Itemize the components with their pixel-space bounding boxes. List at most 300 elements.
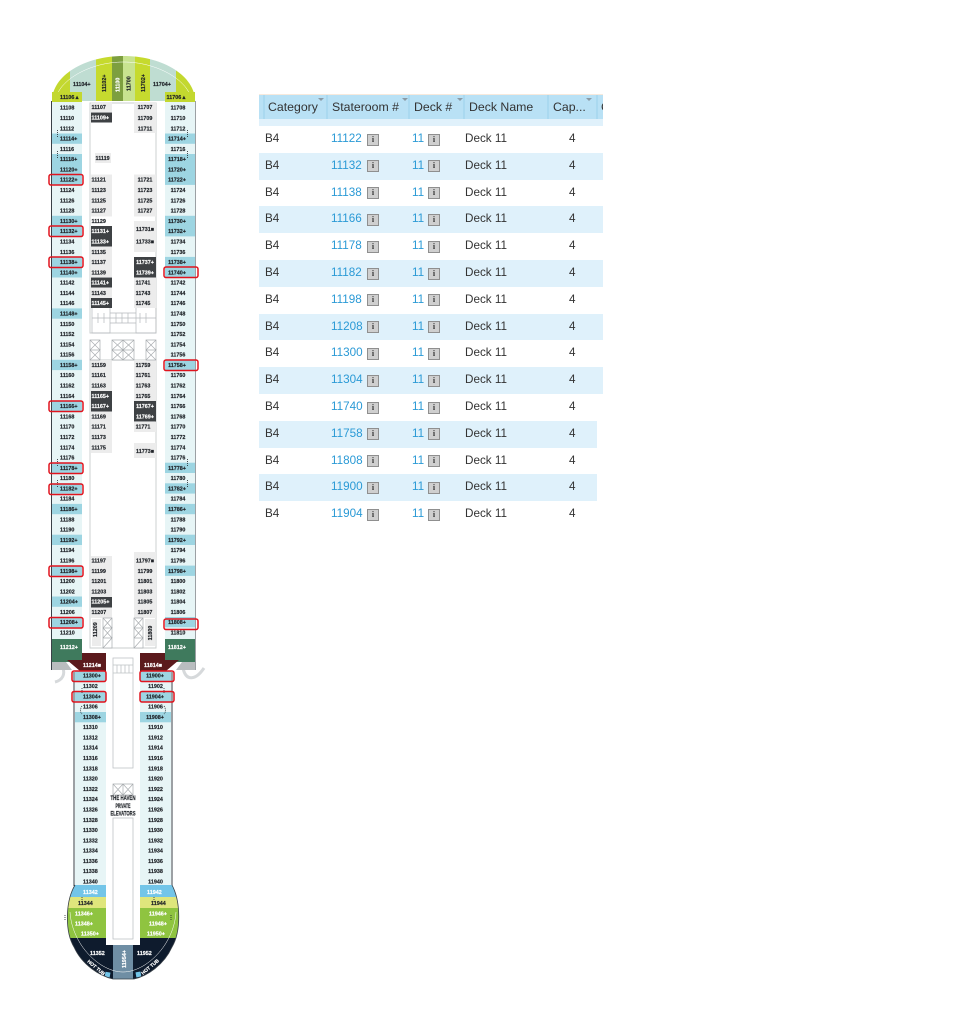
row 11740	[265, 400, 576, 414]
starboard cabin numbers: 11770	[171, 425, 185, 431]
aft starboard cabin numbers: 11928	[148, 818, 163, 824]
row 11300: i	[372, 349, 374, 358]
bow suite labels: 11102+	[102, 74, 108, 92]
central starboard inside cabin numbers: 11773■	[136, 449, 154, 455]
port cabin numbers: 11174	[60, 445, 74, 451]
row 11304: 4	[569, 373, 576, 386]
row 11182: 11182	[331, 266, 362, 279]
central starboard inside cabin numbers: 11733■	[136, 240, 154, 246]
row 11198: Deck 11	[465, 293, 507, 306]
aft starboard cabin numbers: 11914	[148, 746, 163, 752]
starboard cabin numbers: 11734	[171, 240, 185, 246]
row 11132: 11132	[331, 159, 362, 172]
stern cabin labels: 11954+	[122, 950, 128, 968]
row 11740: 11740	[331, 400, 363, 413]
central starboard inside cabin numbers: 11809	[148, 626, 154, 640]
port cabin numbers: 11198+	[60, 569, 78, 575]
aft starboard cabin numbers: 11936	[148, 859, 163, 865]
central port inside cabin numbers: 11161	[92, 373, 106, 379]
central starboard inside cabin numbers: 11799	[138, 569, 152, 575]
starboard cabin numbers: 11742	[171, 281, 185, 287]
port cabin numbers: 11128	[60, 209, 74, 215]
port cabin numbers: 11178+	[60, 466, 78, 472]
central port inside cabin numbers: 11199	[92, 569, 106, 575]
row 11178: 4	[569, 239, 576, 252]
row 11208: 11208	[331, 320, 363, 333]
central starboard inside cabin numbers: 11761	[136, 373, 150, 379]
row 11122: 11122	[331, 132, 362, 145]
starboard cabin numbers: 11708	[171, 106, 185, 112]
central starboard inside cabin numbers: 11771	[136, 425, 150, 431]
aft starboard cabin numbers: 11906	[148, 705, 163, 711]
aft port cabin numbers: 11312	[83, 735, 98, 741]
starboard cabin numbers: 11800	[171, 579, 185, 585]
starboard cabin numbers: 11740+	[168, 270, 186, 276]
aft port cabin numbers: 11310	[83, 725, 98, 731]
port cabin numbers: 11210	[60, 630, 75, 636]
central port inside cabin numbers: 11203	[92, 589, 106, 595]
row 11758	[259, 421, 597, 448]
row 11758: i	[433, 429, 435, 438]
row 11808: i	[433, 456, 435, 465]
row 11740: B4	[265, 400, 279, 413]
starboard cabin numbers	[168, 106, 186, 636]
green suites 11212 and 11812: 11812+	[168, 645, 186, 651]
port cabin numbers: 11190	[60, 528, 74, 534]
port cabin numbers: 11144	[60, 291, 74, 297]
starboard cabin numbers: 11774	[171, 445, 185, 451]
starboard cabin numbers: 11752	[171, 332, 185, 338]
row 11178: 11178	[331, 239, 362, 252]
aft port cabin numbers: 11324	[83, 797, 98, 803]
bow suite labels: 11704+	[153, 82, 171, 88]
row 11304: 11304	[331, 373, 363, 386]
table header: Deck Name	[469, 100, 533, 114]
starboard cabin numbers: 11764	[171, 394, 185, 400]
row 11208: 11	[412, 320, 424, 333]
aft port cabin numbers: 11322	[83, 787, 98, 793]
central port inside cabin numbers: 11175	[92, 445, 106, 451]
starboard cabin numbers: 11716	[171, 147, 185, 153]
starboard cabin numbers: 11802	[171, 589, 185, 595]
port cabin numbers: 11194	[60, 548, 74, 554]
central port inside cabin numbers: 11123	[92, 188, 106, 194]
table header: Cap...	[553, 100, 586, 114]
row 11740: Deck 11	[465, 400, 507, 413]
row 11198	[265, 293, 576, 306]
starboard cabin numbers: 11780	[171, 476, 185, 482]
table header	[259, 94, 603, 119]
central starboard inside cabin numbers: 11723	[138, 188, 152, 194]
aft starboard cabin numbers: 11918	[148, 766, 163, 772]
stern section	[68, 885, 178, 979]
port cabin numbers: 11112	[60, 126, 74, 132]
row 11178: i	[433, 242, 435, 251]
central starboard inside cabin numbers: 11797■	[136, 558, 154, 564]
aft port cabin numbers: 11326	[83, 808, 98, 814]
central starboard inside cabin numbers: 11707	[138, 105, 152, 111]
stern cabin labels: 11944	[151, 901, 166, 907]
central port inside cabin numbers: 11131+	[92, 229, 109, 235]
stern cabin labels: 11946+	[149, 912, 167, 918]
starboard cabin numbers: 11786+	[168, 507, 186, 513]
central port inside cabin numbers: 11207	[92, 610, 106, 616]
row 11122: i	[372, 134, 374, 144]
row 11122	[265, 132, 576, 146]
aft starboard cabin numbers: 11912	[148, 735, 163, 741]
aft port cabin numbers: 11328	[83, 818, 98, 824]
central port inside cabin numbers: 11107	[92, 105, 106, 111]
port cabin numbers: 11140+	[60, 270, 78, 276]
red highlight boxes for B4 cabins	[49, 174, 198, 702]
port cabin numbers: 11152	[60, 332, 74, 338]
aft port cabin numbers: 11306	[83, 705, 98, 711]
aft starboard cabin numbers: 11900+	[146, 674, 164, 680]
stern cabin labels: 11948+	[149, 922, 167, 928]
starboard cabin numbers: 11790	[171, 528, 185, 534]
aft starboard cabin numbers: 11922	[148, 787, 163, 793]
aft starboard cabin numbers: 11920	[148, 777, 163, 783]
starboard cabin numbers: 11776	[171, 456, 185, 462]
aft port cabin numbers: 11302	[83, 684, 98, 690]
row 11208: B4	[265, 320, 279, 333]
starboard cabin numbers: 11748	[171, 312, 185, 318]
central starboard inside cabin numbers: 11709	[138, 116, 152, 122]
central port inside cabin numbers: 11109+	[92, 116, 109, 122]
the haven private elevators label	[110, 796, 136, 818]
starboard cabin numbers: 11784	[171, 497, 185, 503]
starboard cabin numbers: 11718+	[168, 157, 186, 163]
row 11198: 4	[569, 293, 576, 306]
port cabin numbers: 11186+	[60, 507, 78, 513]
green suites 11212 and 11812: 11212+	[60, 645, 78, 651]
port cabin numbers: 11126	[60, 198, 74, 204]
row 11166: i	[372, 215, 374, 224]
central starboard inside cabin numbers: 11745	[136, 301, 150, 307]
forward aft elevators	[103, 618, 143, 648]
row 11808: 11	[412, 454, 424, 467]
row 11166: 4	[569, 212, 576, 225]
port cabin numbers: 11124	[60, 188, 74, 194]
starboard cabin numbers: 11758+	[168, 363, 186, 369]
bow suite labels: 11100	[116, 78, 122, 92]
stern cabin labels	[75, 890, 167, 978]
row 11904: Deck 11	[465, 507, 507, 520]
row 11808: 11808	[331, 454, 363, 467]
port cabin numbers: 11158+	[60, 363, 78, 369]
central port inside cabin numbers: 11127	[92, 209, 106, 215]
port cabin numbers: 11184	[60, 497, 74, 503]
connecting door marks	[58, 130, 188, 921]
row 11208: i	[372, 322, 374, 331]
haven elevators	[113, 784, 133, 795]
starboard cabin numbers: 11746	[171, 301, 185, 307]
port cabin numbers: 11172	[60, 435, 74, 441]
central starboard inside cabin numbers: 11739+	[136, 270, 154, 276]
row 11900: Deck 11	[465, 480, 507, 493]
row 11132: 4	[569, 159, 576, 172]
starboard cabin numbers: 11744	[171, 291, 185, 297]
stern cabin labels: HOT TUB	[140, 958, 161, 977]
row 11900: 4	[569, 480, 576, 493]
stern cabin labels: 11346+	[75, 912, 93, 918]
port cabin numbers: 11170	[60, 425, 74, 431]
port cabin numbers: 11148+	[60, 312, 78, 318]
central starboard inside cabin numbers: 11769+	[136, 414, 154, 420]
row 11304	[259, 367, 603, 394]
table header: Stateroom #	[332, 100, 399, 114]
row 11138: B4	[265, 186, 279, 199]
row 11182: i	[433, 268, 435, 278]
starboard cabin numbers: 11726	[171, 198, 185, 204]
row 11900	[259, 474, 597, 501]
row 11304: i	[372, 376, 374, 385]
row 11904: 11	[412, 507, 424, 520]
row 11182: Deck 11	[465, 266, 507, 279]
row 11208	[259, 314, 603, 340]
central port inside cabin numbers: 11173	[92, 435, 106, 441]
row 11178	[265, 239, 576, 253]
stern outline	[67, 885, 179, 979]
row 11300: 11300	[331, 346, 363, 359]
central port inside cabin numbers: 11159	[92, 363, 106, 369]
port cabin numbers: 11136	[60, 250, 74, 256]
central port inside cabin numbers: 11197	[92, 558, 106, 564]
central port inside cabin numbers	[92, 105, 110, 637]
starboard cabin numbers: 11720+	[168, 167, 186, 173]
bow suite labels	[73, 74, 171, 92]
port cabin numbers: 11162	[60, 384, 74, 390]
starboard cabin numbers: 11760	[171, 373, 185, 379]
central starboard inside cabin numbers: 11741	[136, 281, 150, 287]
port cabin numbers: 11154	[60, 342, 74, 348]
port cabin numbers: 11110	[60, 116, 74, 122]
central starboard inside cabin numbers	[136, 105, 154, 640]
central port inside cabin numbers: 11137	[92, 260, 106, 266]
row 11122: 4	[569, 132, 576, 145]
row 11138: i	[433, 188, 435, 197]
aft starboard cabin numbers: 11934	[148, 849, 163, 855]
port cabin numbers: 11138+	[60, 260, 78, 266]
row 11132: B4	[265, 159, 279, 172]
row 11138	[265, 186, 576, 199]
starboard cabin numbers: 11724	[171, 188, 185, 194]
starboard cabin numbers: 11772	[171, 435, 185, 441]
starboard cabin numbers: 11714+	[168, 137, 186, 143]
row 11904: B4	[265, 507, 279, 520]
aft starboard cabin numbers: 11932	[148, 838, 163, 844]
row 11166: B4	[265, 212, 279, 225]
row 11758: 11	[412, 427, 424, 440]
aft port cabin numbers: 11332	[83, 838, 98, 844]
midship stairs	[92, 308, 156, 333]
port cabin numbers: 11130+	[60, 219, 78, 225]
maroon suites 11214 and 11814	[67, 653, 179, 671]
starboard cabin numbers: 11794	[171, 548, 185, 554]
forward corner cabins	[52, 92, 195, 102]
starboard cabin numbers: 11762	[171, 384, 185, 390]
row 11132: 11	[412, 159, 424, 172]
stern cabin labels: 11344	[78, 901, 93, 907]
starboard cabin numbers: 11754	[171, 342, 185, 348]
header filter strip	[259, 119, 603, 126]
row 11300: Deck 11	[465, 346, 507, 359]
aft starboard cabin numbers: 11916	[148, 756, 163, 762]
row 11758: i	[372, 429, 374, 438]
row 11740: 4	[569, 400, 576, 413]
port cabin numbers: 11132+	[60, 229, 78, 235]
starboard cabin numbers: 11808+	[168, 620, 186, 626]
starboard cabin numbers: 11710	[171, 116, 185, 122]
row 11178: i	[372, 242, 374, 251]
row 11300: 11	[412, 346, 424, 359]
row 11808	[265, 454, 576, 467]
row 11740: i	[372, 402, 374, 412]
row 11304: i	[433, 376, 435, 385]
aft port cabin numbers: 11340	[83, 880, 98, 886]
row 11208: i	[433, 322, 435, 331]
central inside cabin backgrounds	[91, 102, 156, 646]
row 11178: 11	[412, 239, 424, 252]
row 11138: 11	[412, 186, 424, 199]
row 11208: 4	[569, 320, 576, 333]
row 11904: i	[433, 510, 435, 519]
starboard cabin numbers: 11798+	[168, 569, 186, 575]
row 11904: 4	[569, 507, 576, 520]
central starboard inside cabin numbers: 11763	[136, 384, 150, 390]
central starboard inside cabin numbers: 11725	[138, 198, 152, 204]
central port inside cabin numbers: 11163	[92, 384, 106, 390]
row 11122: 11	[412, 132, 424, 145]
port cabin numbers: 11166+	[60, 404, 78, 410]
central port inside cabin numbers: 11129	[92, 219, 106, 225]
central port inside cabin numbers: 11145+	[92, 301, 109, 307]
central port inside cabin numbers: 11169	[92, 414, 106, 420]
port cabin numbers: 11142	[60, 281, 74, 287]
dark family cabins	[91, 112, 156, 608]
port cabin numbers: 11164	[60, 394, 74, 400]
aft starboard cabin numbers: 11926	[148, 808, 163, 814]
haven corridor	[113, 658, 133, 939]
central port inside cabin numbers: 11201	[92, 579, 106, 585]
row 11808: B4	[265, 454, 279, 467]
starboard cabin numbers: 11750	[171, 322, 185, 328]
port cabin numbers: 11116	[60, 147, 74, 153]
row 11900: 11	[412, 480, 424, 493]
central port inside cabin numbers: 11205+	[92, 600, 109, 606]
blue highlighted cabin rows	[52, 134, 195, 722]
aft starboard cabin numbers: 11902	[148, 684, 163, 690]
row 11900: i	[433, 483, 435, 492]
port cabin numbers: 11146	[60, 301, 74, 307]
aft port cabin numbers: 11308+	[83, 715, 101, 721]
ship hull outline	[52, 101, 195, 887]
port cabin numbers: 11134	[60, 240, 74, 246]
stern cabin labels: 11352	[90, 951, 105, 957]
stern cabin labels: 11342	[83, 890, 98, 896]
aft starboard cabin numbers: 11924	[148, 797, 163, 803]
starboard cabin numbers: 11728	[171, 209, 185, 215]
bow dome suites	[53, 56, 194, 101]
row 11182: 4	[569, 266, 576, 279]
stern cabin labels: 11950+	[147, 932, 165, 938]
starboard cabin numbers: 11730+	[168, 219, 186, 225]
bow suite labels: 11700	[126, 76, 132, 91]
stern cabin labels: 11348+	[75, 922, 93, 928]
port cabin numbers: 11156	[60, 353, 74, 359]
table header: Deck #	[414, 100, 452, 114]
row 11304: B4	[265, 373, 279, 386]
port cabin numbers: 11176	[60, 456, 74, 462]
starboard cabin numbers: 11736	[171, 250, 185, 256]
central starboard inside cabin numbers: 11743	[136, 291, 150, 297]
row 11740: 11	[412, 400, 424, 413]
central starboard inside cabin numbers: 11765	[136, 394, 150, 400]
aft port cabin numbers: 11320	[83, 777, 98, 783]
row 11138: 4	[569, 186, 576, 199]
row 11138: Deck 11	[465, 186, 507, 199]
port cabin numbers: 11120+	[60, 167, 78, 173]
row 11198: i	[433, 295, 435, 304]
deck plan	[48, 56, 205, 980]
starboard cabin numbers: 11782+	[168, 486, 186, 492]
row 11182: B4	[265, 266, 279, 279]
row 11808: i	[372, 456, 374, 465]
row 11166	[259, 206, 603, 233]
starboard cabin numbers: 11766	[171, 404, 185, 410]
central port inside cabin numbers: 11135	[92, 250, 106, 256]
row 11122: Deck 11	[465, 132, 507, 145]
row 11178: B4	[265, 239, 279, 252]
row 11904	[265, 507, 576, 521]
row 11182: i	[372, 268, 374, 278]
row 11166: i	[433, 215, 435, 224]
row 11132: i	[433, 161, 435, 170]
stern cabin labels: 11952	[137, 951, 152, 957]
row 11166: 11166	[331, 212, 362, 225]
starboard cabin numbers: 11756	[171, 353, 185, 359]
central starboard inside cabin numbers: 11711	[138, 126, 152, 132]
the haven private elevators label: PRIVATE	[116, 804, 130, 810]
row 11198: i	[372, 295, 374, 304]
aft port cabin numbers: 11300+	[83, 674, 101, 680]
port cabin numbers: 11118+	[60, 157, 77, 163]
row 11904: 11904	[331, 507, 363, 520]
starboard cabin numbers: 11806	[171, 610, 185, 616]
port cabin numbers: 11160	[60, 373, 74, 379]
central port inside cabin numbers: 11139	[92, 270, 106, 276]
starboard cabin numbers: 11778+	[168, 466, 186, 472]
port cabin numbers: 11202	[60, 589, 75, 595]
elevator shafts midship	[90, 340, 156, 360]
maroon suites 11214 and 11814: 11214■	[83, 663, 101, 669]
port cabin numbers: 11200	[60, 579, 75, 585]
stern cabin labels: 11942	[147, 890, 162, 896]
starboard cabin numbers: 11738+	[168, 260, 186, 266]
row 11166: 11	[412, 212, 424, 225]
port cabin numbers: 11206	[60, 610, 75, 616]
row 11166: Deck 11	[465, 212, 507, 225]
starboard cabin numbers: 11722+	[168, 178, 186, 184]
row 11300: 4	[569, 346, 576, 359]
port cabin numbers: 11192+	[60, 538, 78, 544]
aft starboard cabin numbers: 11908+	[146, 715, 164, 721]
port cabin numbers: 11168	[60, 414, 74, 420]
central starboard inside cabin numbers: 11801	[138, 579, 152, 585]
corner grey wings	[55, 668, 204, 682]
row 11198: 11198	[331, 293, 362, 306]
row 11758: 4	[569, 427, 576, 440]
